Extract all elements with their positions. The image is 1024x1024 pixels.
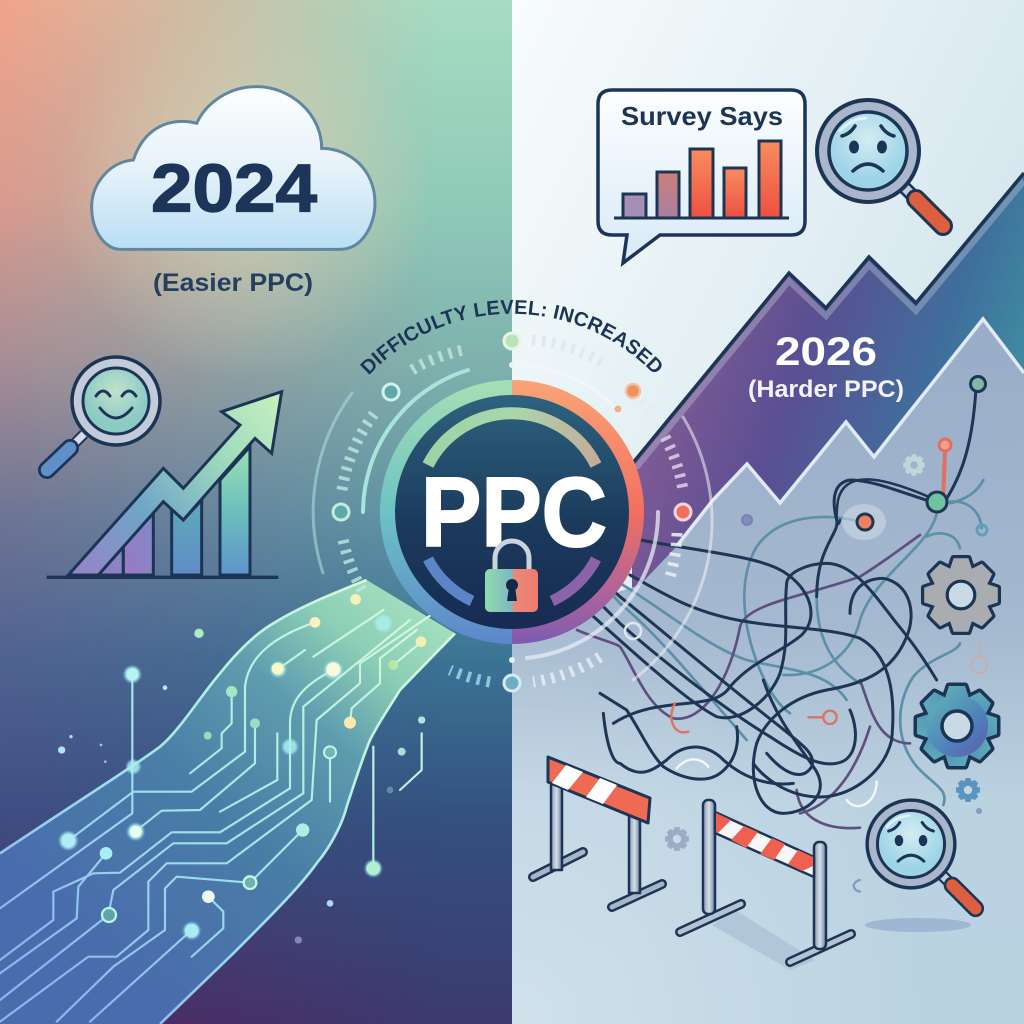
- magnifier: sad face bottom: [867, 800, 976, 908]
- rising chart with arrow: [47, 392, 282, 577]
- faint loose marks: [677, 759, 877, 806]
- year label 2024: 2024: [151, 151, 317, 227]
- right panel lower fade: [512, 600, 1024, 1024]
- survey bar chart: [614, 141, 789, 218]
- barrier 2: [680, 800, 851, 962]
- left panel background: 2024: [0, 0, 512, 1024]
- cloud: 2024: [92, 87, 375, 249]
- top gauge arc: [428, 413, 596, 465]
- tangled lines: [577, 480, 987, 892]
- small gears: [665, 454, 980, 851]
- magnifier shadow: [865, 918, 971, 932]
- gear: grey: [924, 558, 998, 632]
- label: easier PPC: (Easier PPC): [153, 269, 313, 297]
- speech bubble: survey says: [598, 90, 805, 263]
- label: harder PPC: (Harder PPC): [748, 376, 904, 403]
- gauge nodes: [333, 333, 691, 691]
- barrier 2 shadow: [712, 910, 815, 970]
- glowing nodes: [60, 615, 391, 939]
- label: 2026: 2026: [775, 330, 877, 374]
- network nodes on right mountain: [742, 376, 987, 814]
- barrier 1: [533, 757, 662, 907]
- magnifier: sad face top: [817, 100, 943, 226]
- front mountain: [512, 319, 1024, 1024]
- PPC wordmark: PPC: [421, 457, 607, 567]
- back mountain chart: [632, 173, 1024, 640]
- circuit traces: [0, 610, 433, 1022]
- PPC central badge: [380, 380, 644, 644]
- padlock icon: [485, 541, 538, 612]
- right panel background: 2026: [512, 0, 1024, 1024]
- gear: blue: [917, 686, 997, 766]
- survey heading: Survey Says: [621, 101, 783, 131]
- data stream: glowing circuit band: [0, 580, 455, 1024]
- magnifier: happy face: [47, 357, 160, 470]
- lower gauge arcs: [428, 559, 596, 601]
- curved label: difficulty level increased: DIFFICULTY LEVEL: INCREASED: [360, 300, 662, 374]
- difficulty gauge rings and ticks: [313, 340, 712, 682]
- scattered red hook marks: [671, 703, 837, 732]
